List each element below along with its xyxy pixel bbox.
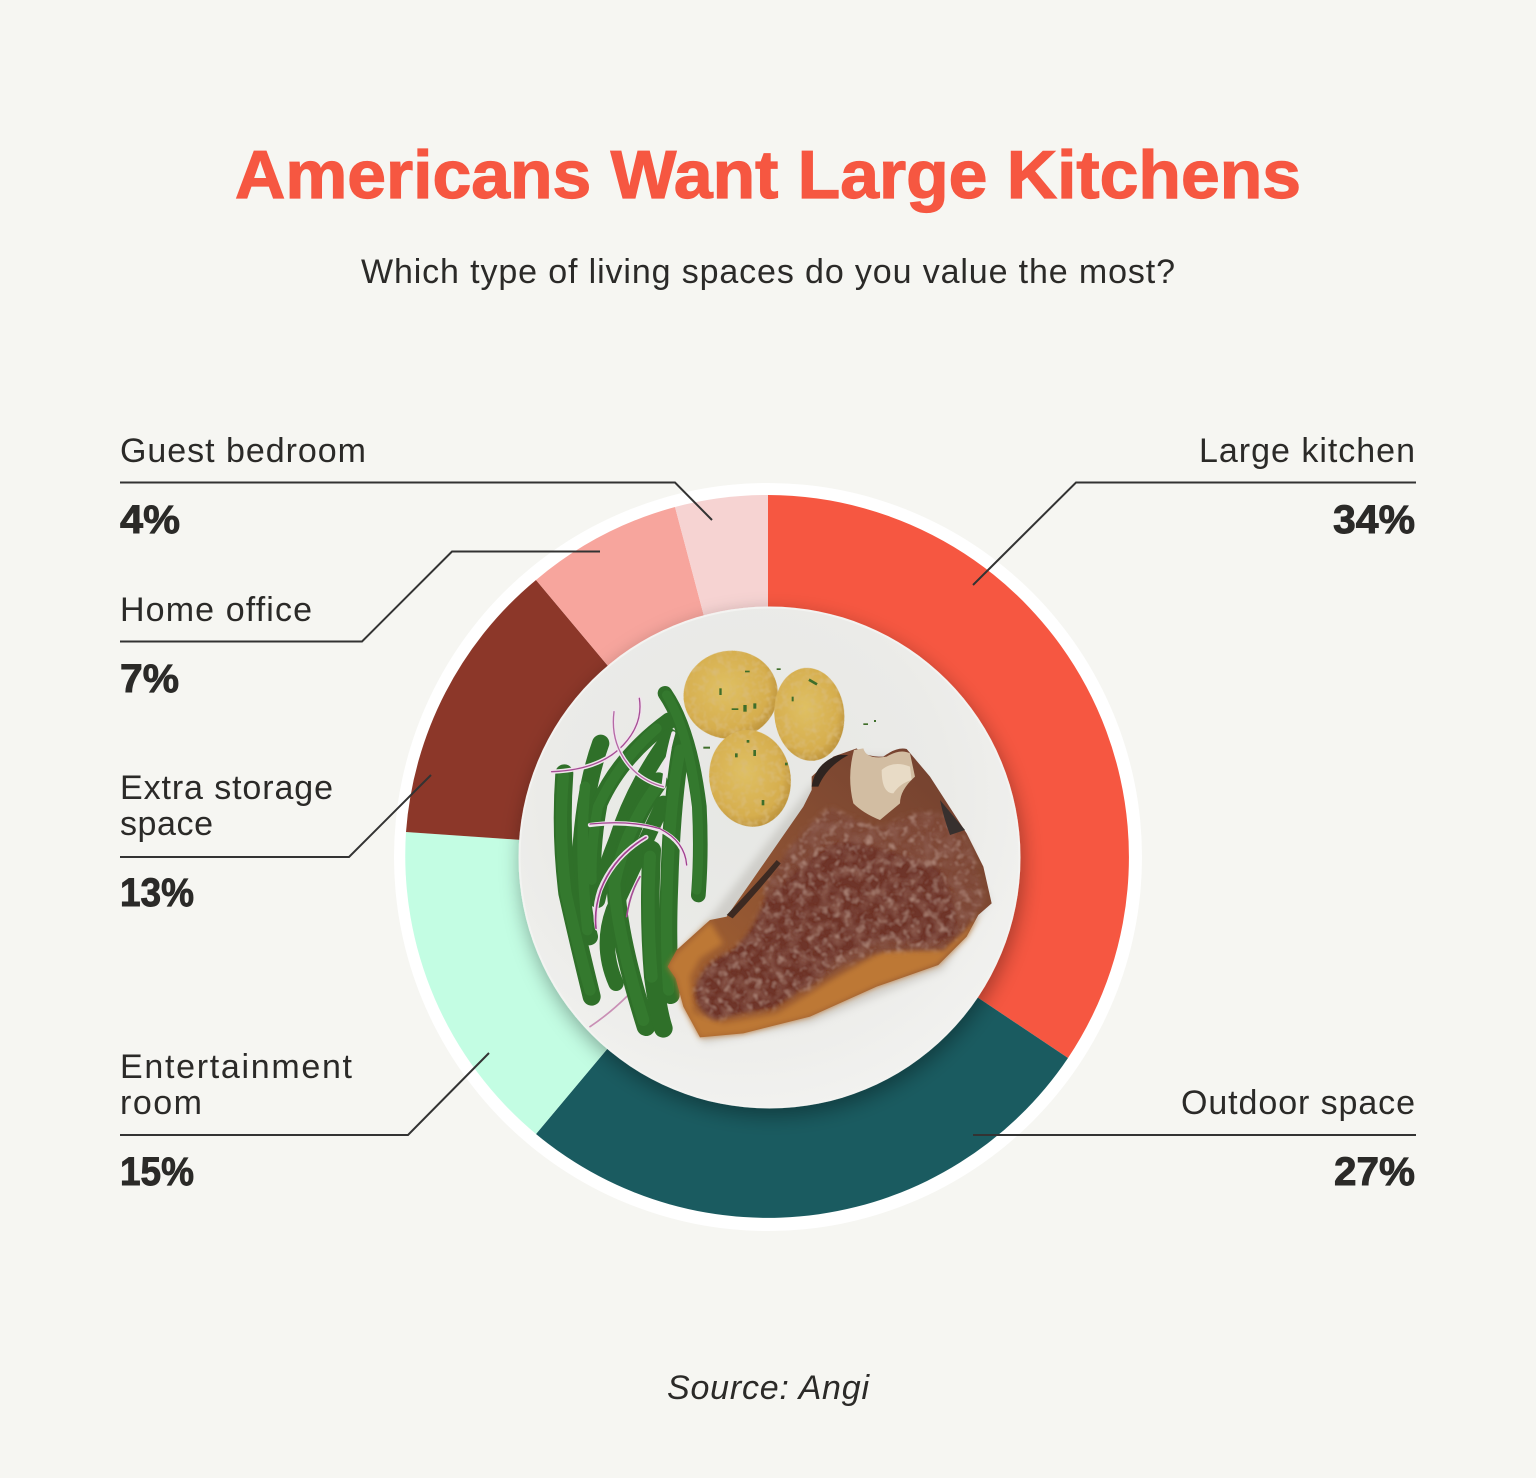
label: outdoor space <box>973 1084 1416 1194</box>
donut chart <box>394 483 1142 1231</box>
segment: entertainment room 15% <box>405 832 768 1134</box>
char marks <box>812 755 848 787</box>
label: large kitchen: 34% <box>1333 498 1415 542</box>
label: outdoor space: Outdoor space <box>1181 1084 1415 1122</box>
central dark meat <box>693 840 958 1022</box>
herb specks <box>703 668 876 805</box>
label: guest bedroom: Guest bedroom <box>120 432 366 470</box>
label: extra storage space: 13% <box>120 871 194 915</box>
label: large kitchen <box>973 432 1416 585</box>
segment: home office 7% <box>536 507 768 857</box>
label: extra storage space: space <box>120 805 213 843</box>
segment: extra storage space 13% <box>406 580 768 857</box>
food shadow <box>670 757 990 1043</box>
label: home office: Home office <box>120 591 312 629</box>
segment: outdoor space 27% <box>536 857 1068 1218</box>
label: entertainment room <box>120 1048 489 1194</box>
subtitle: Which type of living spaces do you value the most? <box>361 253 1175 291</box>
label: extra storage space <box>120 769 431 915</box>
golden edge <box>668 915 979 1037</box>
steak <box>668 748 992 1037</box>
red onion slices <box>552 698 687 928</box>
potatoes <box>676 643 876 833</box>
upper meat, mottled <box>763 807 985 993</box>
steak crust <box>668 748 992 1037</box>
source note: Source: Angi <box>667 1369 870 1407</box>
plate <box>518 606 1020 1108</box>
t-bone <box>850 748 915 820</box>
label: home office <box>120 552 600 701</box>
label: guest bedroom: 4% <box>120 498 180 542</box>
label: entertainment room: Entertainment <box>120 1048 353 1086</box>
title: Americans Want Large Kitchens <box>235 137 1301 213</box>
green beans <box>552 693 700 1028</box>
label: extra storage space: Extra storage <box>120 769 333 807</box>
label: guest bedroom <box>120 432 712 542</box>
plate of steak, potatoes and green beans <box>518 606 1020 1108</box>
label: entertainment room: 15% <box>120 1150 194 1194</box>
white ring <box>394 483 1142 1231</box>
segment: large kitchen 34% <box>768 495 1129 1058</box>
segment: guest bedroom 4% <box>675 495 768 857</box>
label: outdoor space: 27% <box>1334 1150 1415 1194</box>
label: home office: 7% <box>120 657 179 701</box>
label: large kitchen: Large kitchen <box>1199 432 1415 470</box>
label: entertainment room: room <box>120 1084 202 1122</box>
